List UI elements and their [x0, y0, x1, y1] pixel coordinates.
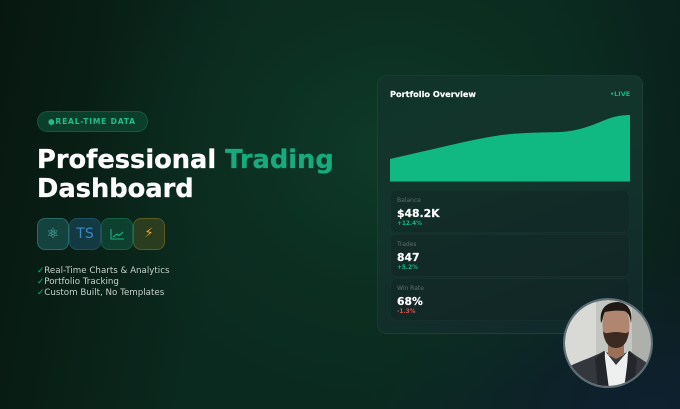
- icon: react: [37, 218, 69, 250]
- stat change: +12.4%: [397, 220, 422, 226]
- stat card: win rate: [390, 278, 630, 321]
- stat label: Trades: [397, 241, 417, 248]
- icon: react: ⚛: [47, 226, 59, 242]
- avatar portrait: [563, 298, 653, 388]
- feature item: ✓Custom Built, No Templates: [37, 288, 164, 298]
- stat value: 847: [397, 251, 420, 264]
- title: Dashboard: [37, 174, 194, 204]
- stat value: 68%: [397, 295, 423, 308]
- stat label: Balance: [397, 197, 421, 204]
- tech icons row: [37, 218, 165, 250]
- stat card: trades: [390, 234, 630, 277]
- feature list: [37, 266, 170, 298]
- live indicator: •LIVE: [610, 90, 630, 98]
- feature item: ✓Portfolio Tracking: [37, 276, 119, 286]
- title: [37, 144, 334, 204]
- icon: chart: [101, 218, 133, 250]
- icon: bolt: [133, 218, 165, 250]
- stat value: $48.2K: [397, 207, 440, 220]
- feature item: ✓Real-Time Charts & Analytics: [37, 266, 170, 276]
- badge: real-time data: [37, 111, 148, 132]
- stat card: balance: [390, 190, 630, 233]
- panel heading: Portfolio Overview: [390, 88, 476, 98]
- panel: portfolio overview: [377, 75, 643, 334]
- title: Professional Trading: [37, 144, 334, 174]
- icon: typescript: TS: [76, 226, 94, 242]
- badge: real-time data: ●REAL-TIME DATA: [48, 117, 136, 126]
- stat change: +5.2%: [397, 264, 418, 270]
- icon: bolt: ⚡: [144, 226, 154, 241]
- icon: typescript: [69, 218, 101, 250]
- stat label: Win Rate: [397, 285, 424, 292]
- stat change: -1.3%: [397, 308, 415, 314]
- area chart: [390, 115, 630, 182]
